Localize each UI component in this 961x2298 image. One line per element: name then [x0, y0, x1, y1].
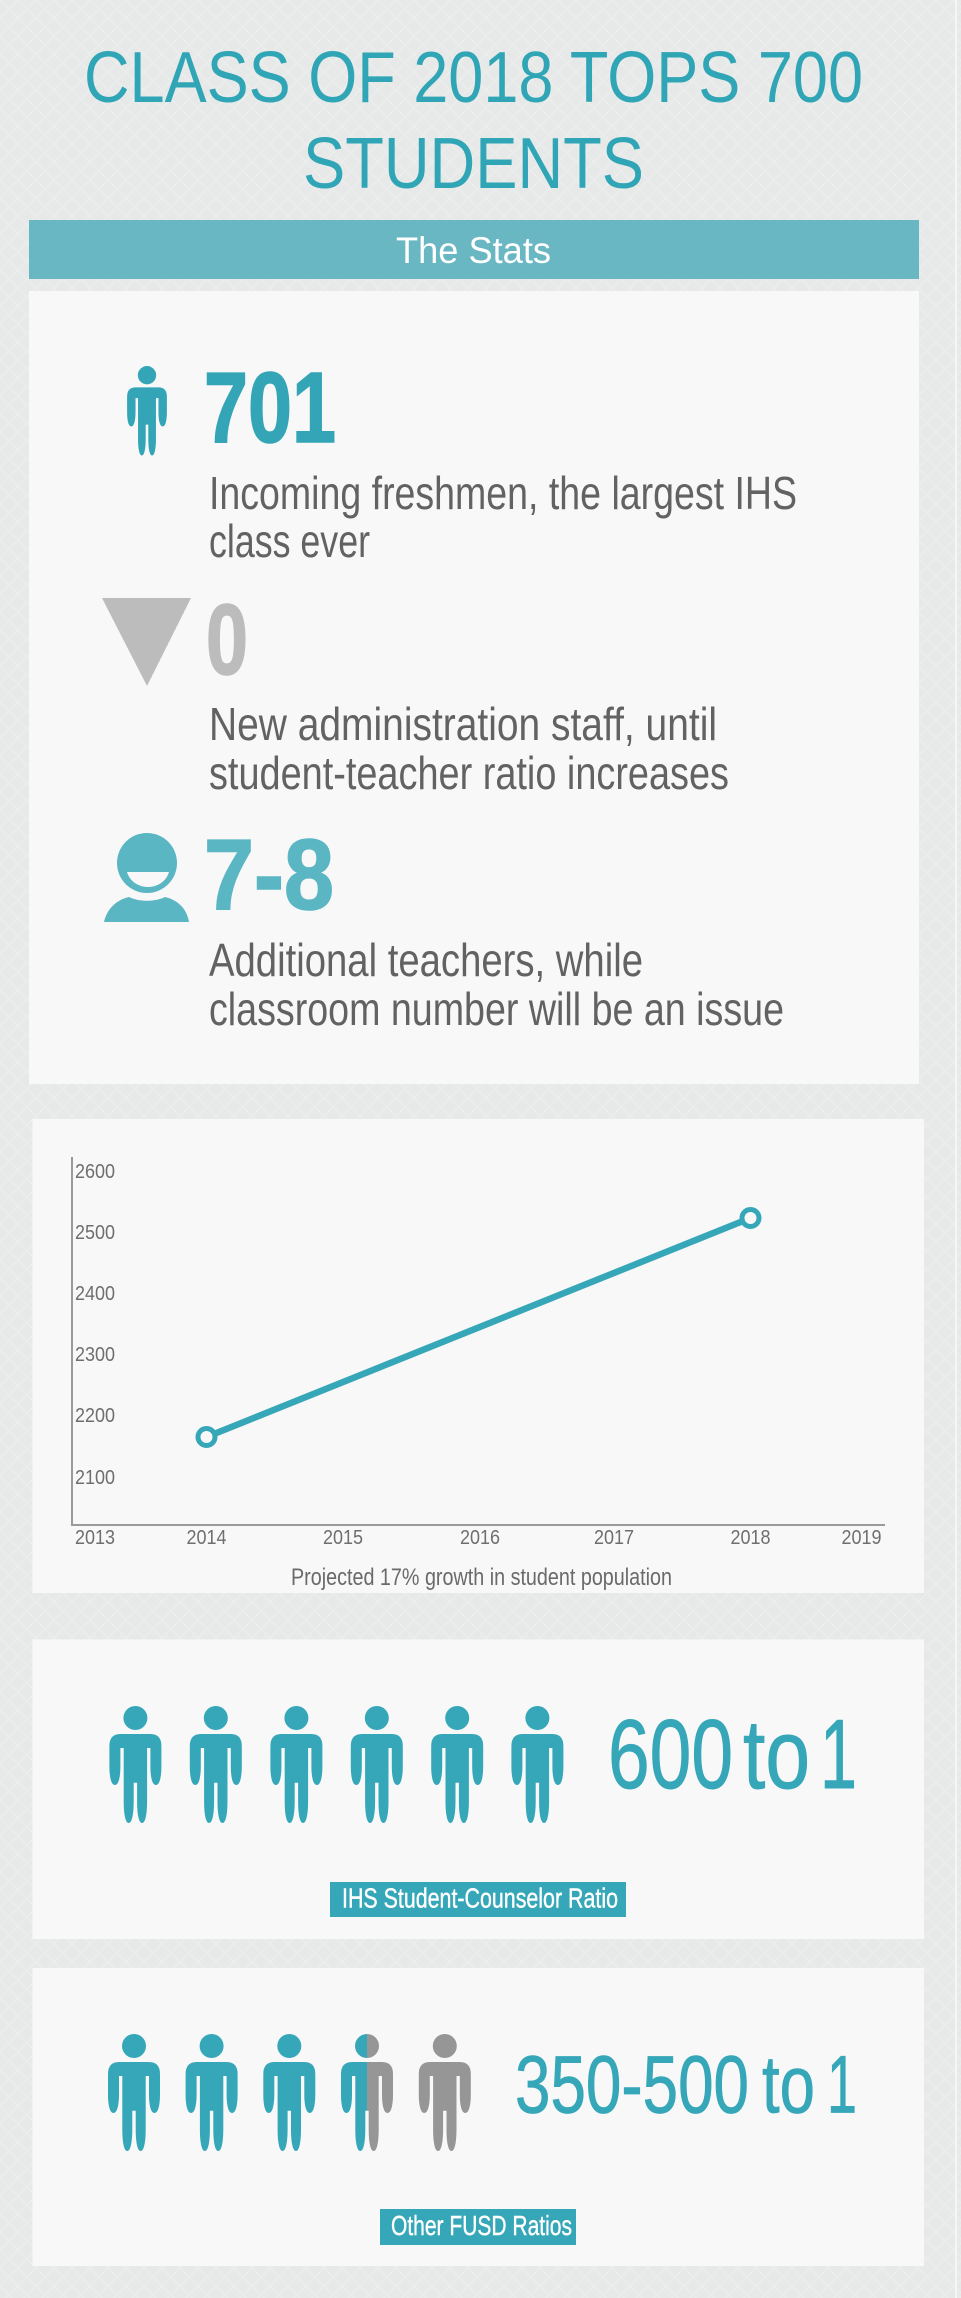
y-axis labels: 2200 [75, 1404, 115, 1427]
section banner: The Stats [29, 220, 919, 279]
text: additional teachers: Additional teachers, while [209, 934, 643, 986]
title: STUDENTS [303, 124, 644, 204]
icons: people partly filled [108, 2034, 471, 2151]
panel: IHS ratio [32, 1640, 924, 1939]
x-axis labels: 2013 [75, 1526, 115, 1549]
ratio: 350-500 to 1: 350-500 [515, 2040, 749, 2130]
x-axis labels: 2017 [594, 1526, 634, 1549]
data line [198, 1210, 759, 1446]
x-axis labels: 2014 [186, 1526, 226, 1549]
stat: 701: 701 [204, 352, 336, 464]
ratio: 350-500 to 1: 1 [827, 2040, 857, 2130]
chart caption: Projected 17% growth in student population [291, 1564, 672, 1591]
label: IHS student-counselor ratio: IHS Student-Counselor Ratio [342, 1882, 618, 1914]
y-axis labels: 2500 [75, 1221, 115, 1244]
stat: 7-8: 7-8 [204, 819, 334, 931]
section banner: The Stats: The Stats [396, 230, 551, 271]
label: IHS student-counselor ratio [330, 1882, 626, 1917]
text: new administration staff [209, 698, 729, 799]
text: incoming freshmen: class ever [209, 515, 370, 567]
icon: down triangle [102, 598, 191, 686]
x-axis labels: 2016 [460, 1526, 500, 1549]
text: incoming freshmen: Incoming freshmen, the largest IHS [209, 467, 797, 519]
x-axis labels [75, 1526, 882, 1549]
title: CLASS OF 2018 TOPS 700 [84, 38, 863, 118]
label: other FUSD ratios: Other FUSD Ratios [391, 2210, 572, 2241]
ratio: 600 to 1: 600 [608, 1699, 733, 1809]
x-axis labels: 2018 [730, 1526, 770, 1549]
panel: line chart [32, 1119, 924, 1593]
y-axis labels: 2100 [75, 1466, 115, 1489]
x-axis labels: 2015 [323, 1526, 363, 1549]
icon: person [127, 366, 167, 456]
panel: other FUSD ratios [32, 1968, 924, 2266]
panel: the stats [29, 291, 919, 1084]
y-axis labels: 2300 [75, 1343, 115, 1366]
y-axis labels: 2600 [75, 1160, 115, 1183]
ratio: 600 to 1: 1 [820, 1699, 857, 1809]
text: additional teachers: classroom number will be an issue [209, 983, 784, 1035]
title [84, 38, 863, 204]
stat: 0: 0 [206, 584, 248, 696]
text: additional teachers [209, 934, 784, 1035]
icon: teacher [104, 833, 189, 922]
ratio: 350-500 to 1: to [762, 2040, 815, 2130]
label: other FUSD ratios [380, 2209, 576, 2245]
text: new administration staff: New administration staff, until [209, 698, 717, 750]
ratio: 600 to 1: to [743, 1699, 810, 1809]
text: new administration staff: student-teacher ratio increases [209, 747, 729, 799]
text: incoming freshmen [209, 467, 797, 567]
chart axes [72, 1157, 885, 1525]
icons: six people [109, 1706, 563, 1823]
x-axis labels: 2019 [842, 1526, 882, 1549]
y-axis labels: 2400 [75, 1282, 115, 1305]
y-axis labels [75, 1160, 115, 1489]
ratio: 600 to 1 [608, 1699, 857, 1809]
